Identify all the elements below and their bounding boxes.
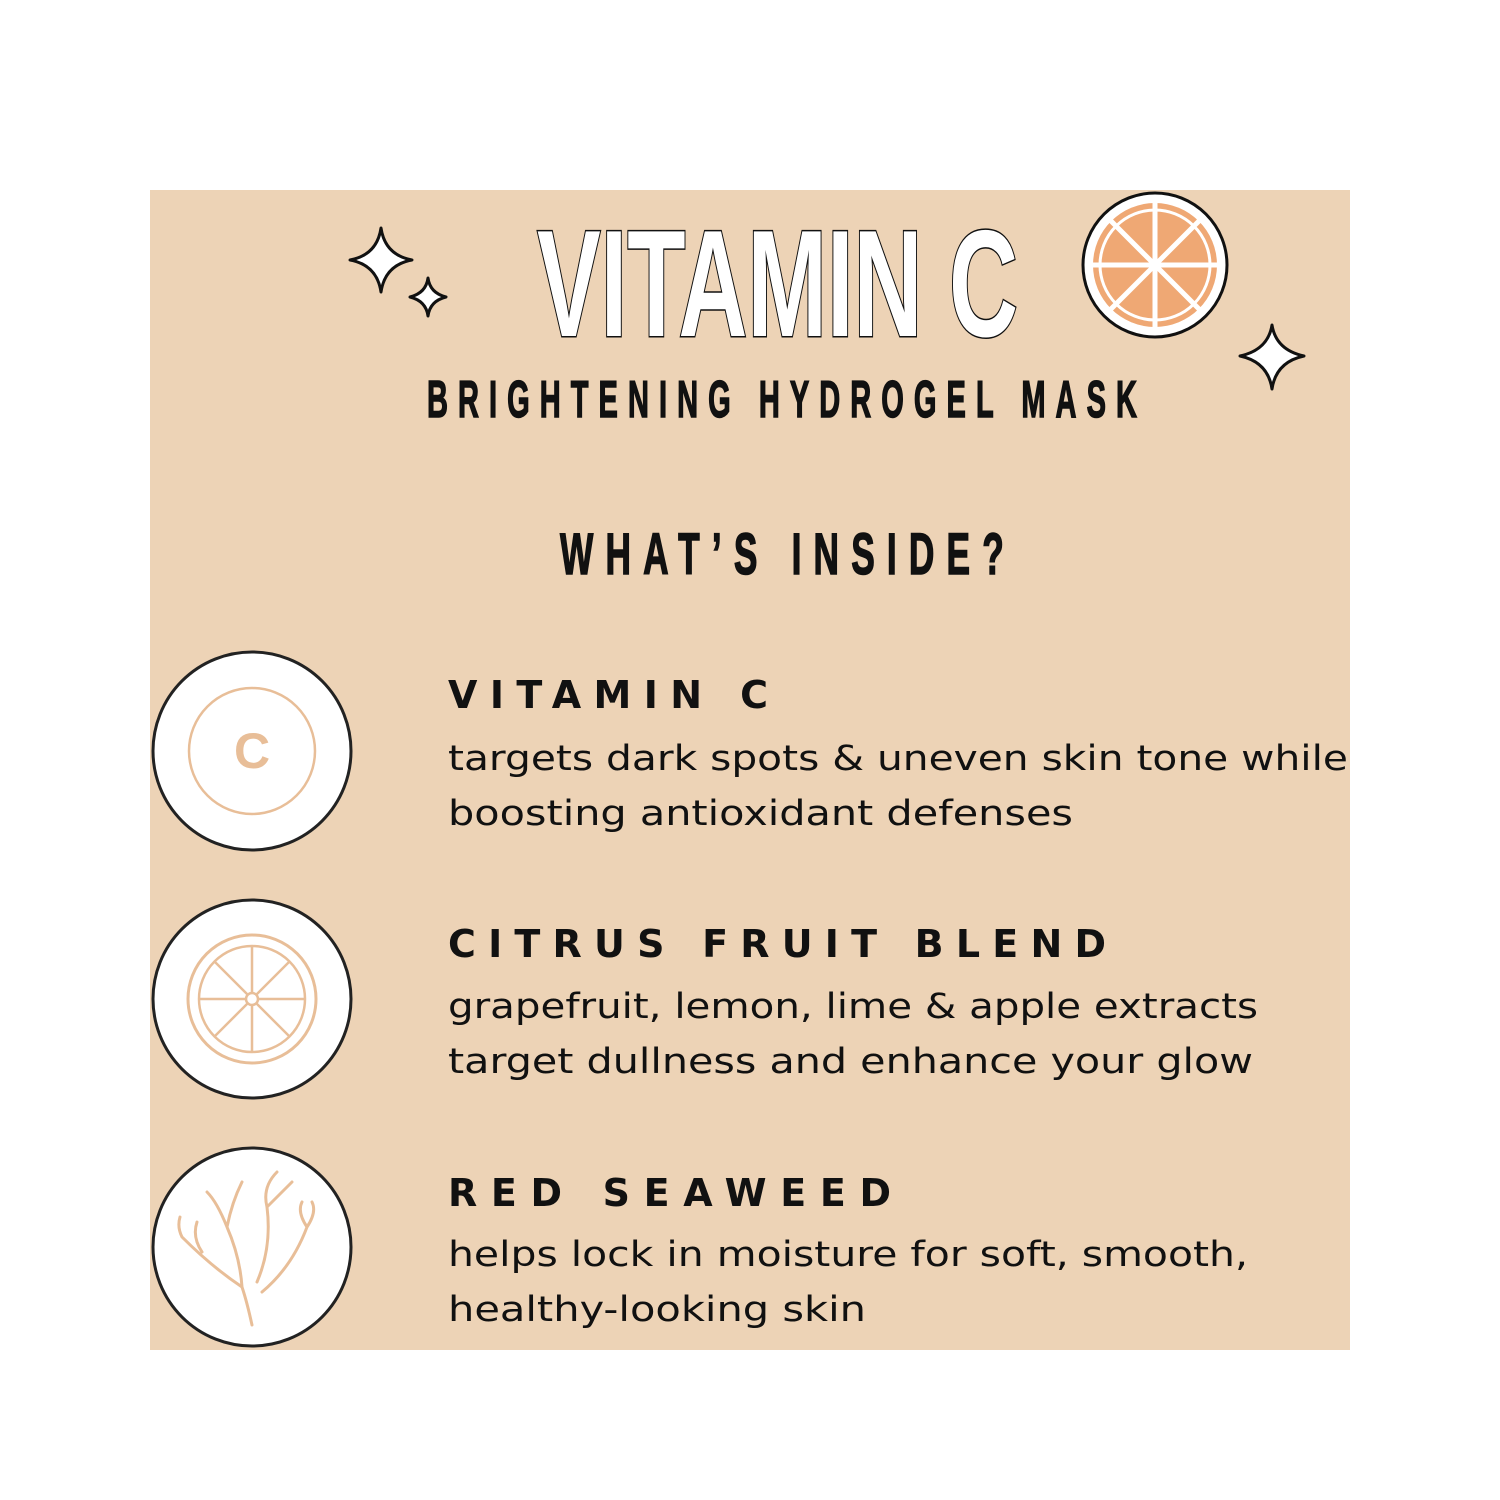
icon: seaweed circle (153, 1148, 351, 1346)
text block: citrus fruit blend: grapefruit, lemon, lime & apple extracts (448, 987, 1258, 1027)
text block: red seaweed: RED SEAWEED (448, 1171, 891, 1215)
icon: vitamin c circle: C (234, 723, 270, 779)
icon: sparkle right (1240, 325, 1304, 389)
icon: vitamin c circle (153, 652, 351, 850)
text block: vitamin c: VITAMIN C (448, 673, 768, 717)
text block: citrus fruit blend (448, 922, 1258, 1082)
icon: citrus circle (153, 900, 351, 1098)
text block: red seaweed: healthy-looking skin (448, 1290, 866, 1330)
text block: vitamin c: targets dark spots & uneven skin tone while (448, 739, 1348, 779)
text block: vitamin c (448, 673, 1348, 834)
icon: orange slice (1083, 193, 1227, 337)
text block: citrus fruit blend: CITRUS FRUIT BLEND (448, 922, 1106, 966)
text block: red seaweed: helps lock in moisture for soft, smooth, (448, 1235, 1248, 1275)
title: VITAMIN C (537, 199, 1018, 369)
text block: vitamin c: boosting antioxidant defenses (448, 794, 1073, 834)
text block: citrus fruit blend: target dullness and enhance your glow (448, 1042, 1253, 1082)
panel: background (150, 190, 1350, 1350)
text block: red seaweed (448, 1171, 1248, 1330)
icon: sparkles left (350, 228, 446, 316)
heading: what's inside: WHAT’S INSIDE? (560, 522, 1016, 587)
